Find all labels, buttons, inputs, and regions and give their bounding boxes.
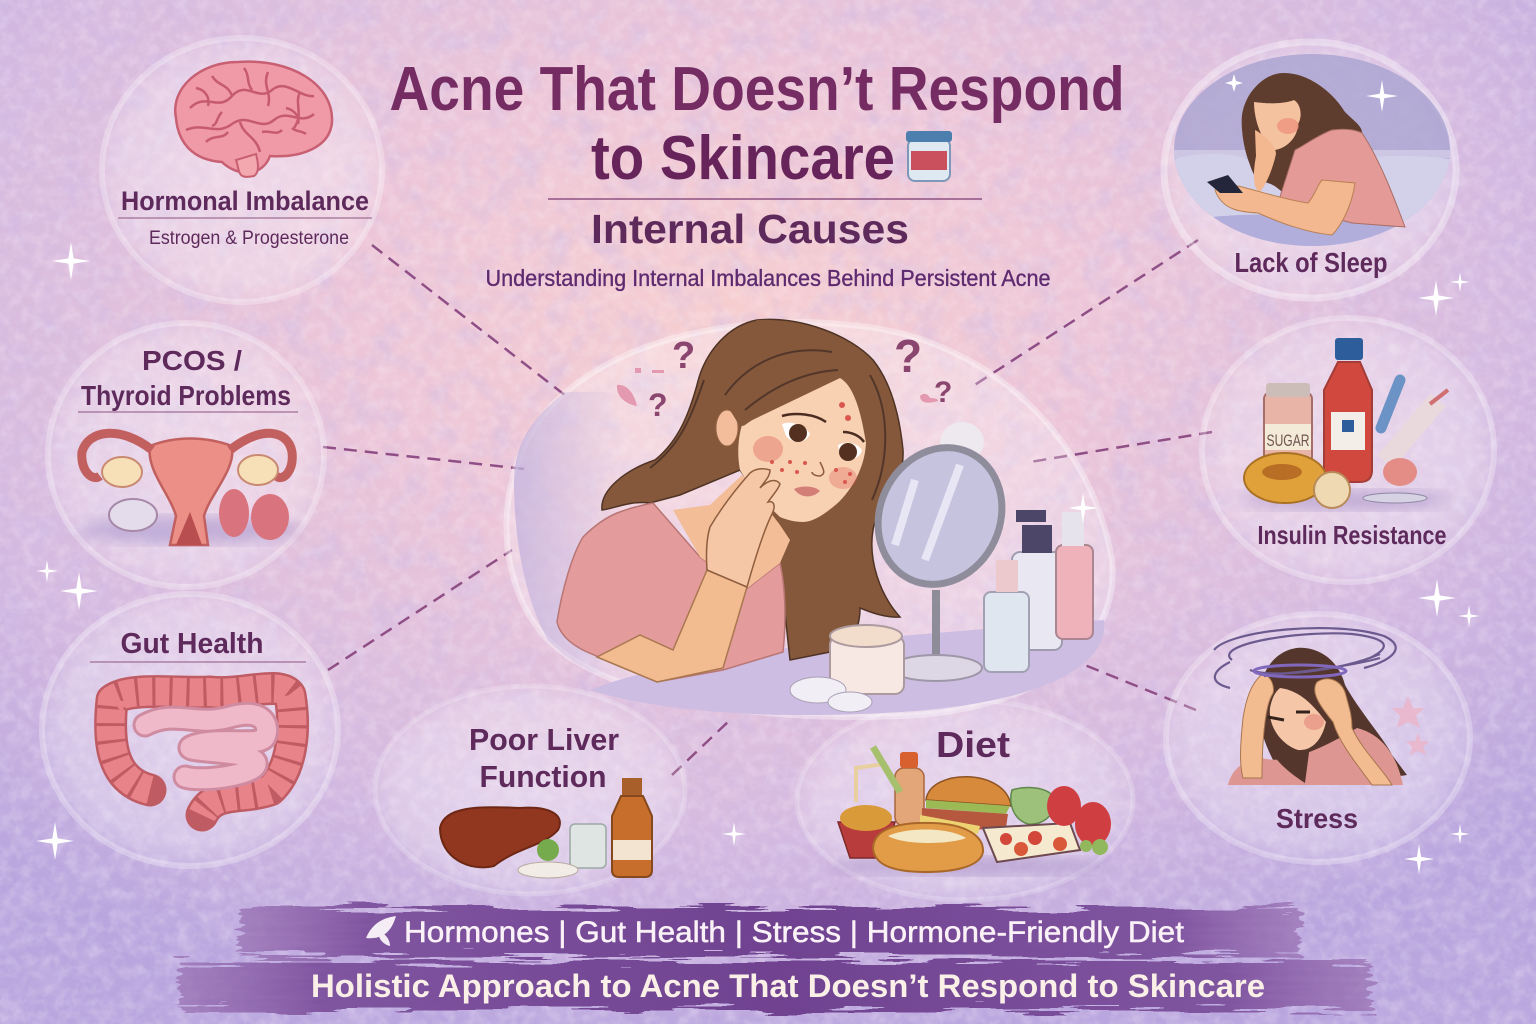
icon: brain	[175, 62, 332, 177]
heading: insulin resistance: Insulin Resistance	[1258, 520, 1446, 550]
heading: poor liver function: Function	[480, 759, 606, 794]
brush strokes	[180, 908, 1370, 1010]
hand	[706, 469, 780, 587]
hair fringe	[725, 320, 855, 426]
hair strands over shirt	[1265, 730, 1310, 783]
swirls	[1214, 628, 1396, 688]
heading: stress: Stress	[1276, 803, 1358, 834]
subtitle: internal causes: Internal Causes	[591, 206, 909, 252]
decorative sparkles	[36, 80, 1480, 874]
arms and hands	[1241, 674, 1274, 778]
hair highlights	[650, 350, 885, 500]
arms	[1254, 130, 1276, 192]
panel: PCOS and thyroid	[48, 323, 324, 587]
heading: poor liver function	[469, 722, 619, 794]
icon: insulin items	[1240, 338, 1450, 510]
panel: insulin resistance	[1202, 318, 1494, 582]
icon: uterus and ovaries	[80, 433, 300, 545]
panel: central illustration	[507, 319, 1113, 717]
icon: amber bottle	[612, 778, 652, 877]
small sparkle	[1225, 74, 1243, 92]
skincare bottles	[984, 510, 1093, 672]
heading: PCOS / Thyroid Problems: Thyroid Problems	[81, 380, 291, 411]
window curtains	[514, 392, 620, 680]
bottom banner	[180, 908, 1370, 1010]
shirt	[1228, 728, 1403, 785]
face	[1270, 688, 1326, 750]
icon: intestines	[111, 688, 293, 815]
hair	[1242, 73, 1362, 192]
shirt	[1278, 129, 1405, 227]
ear	[716, 410, 738, 446]
icon: liver	[440, 807, 560, 867]
banner line one: Hormones | Gut Health | Stress | Hormone-Friendly Diet	[404, 916, 1185, 949]
neck	[673, 475, 790, 590]
icon: insulin items: SUGAR	[1266, 431, 1310, 450]
question marks: ?	[648, 387, 668, 423]
title: to Skincare	[591, 124, 895, 193]
long hair back	[602, 319, 903, 660]
stars	[1392, 696, 1424, 728]
forearm	[597, 570, 747, 682]
panel: hormonal imbalance	[102, 38, 382, 302]
text: estrogen and progesterone: Estrogen & Progesterone	[149, 228, 349, 249]
question marks	[617, 330, 952, 423]
heading: gut health: Gut Health	[120, 628, 264, 660]
heading: diet: Diet	[936, 724, 1010, 765]
panel: gut health	[42, 594, 338, 866]
icon: skincare jar	[906, 131, 952, 181]
scene background	[507, 322, 1113, 717]
panel: poor liver function	[375, 686, 685, 894]
heading: lack of sleep: Lack of Sleep	[1234, 247, 1388, 278]
tagline: Understanding Internal Imbalances Behind Persistent Acne	[486, 265, 1050, 291]
mirror	[856, 422, 1024, 681]
panel: diet	[797, 700, 1133, 900]
scene: girl on phone in bed	[1170, 50, 1455, 250]
phone	[1207, 175, 1243, 193]
panel: stress	[1166, 614, 1470, 862]
connector lines	[323, 240, 1212, 775]
icon: supplements	[518, 824, 606, 878]
title: Acne That Doesn’t Respond	[390, 55, 1124, 124]
hair	[1258, 648, 1407, 785]
bedroom backdrop	[1170, 50, 1455, 250]
heading: hormonal imbalance: Hormonal Imbalance	[121, 186, 369, 216]
heading: poor liver function: Poor Liver	[469, 722, 619, 757]
question marks: ?	[934, 376, 952, 409]
title	[390, 55, 1124, 193]
banner line two: Holistic Approach to Acne That Doesn’t Respond to Skincare	[311, 968, 1265, 1004]
icon: leaf	[366, 916, 396, 946]
face	[738, 378, 866, 522]
table	[590, 620, 1104, 715]
panel: lack of sleep	[1164, 42, 1456, 298]
question marks: ?	[894, 330, 922, 382]
face	[1254, 100, 1301, 150]
icon: food pile	[830, 747, 1111, 875]
shirt	[557, 503, 785, 682]
icon: stressed girl	[1214, 628, 1429, 785]
heading: PCOS / Thyroid Problems	[78, 345, 298, 412]
cream jar	[790, 625, 904, 712]
question marks: ?	[672, 335, 695, 377]
eyes, brows, nose and mouth	[782, 414, 864, 496]
heading: PCOS / Thyroid Problems: PCOS /	[142, 345, 242, 376]
blemishes	[753, 402, 857, 489]
